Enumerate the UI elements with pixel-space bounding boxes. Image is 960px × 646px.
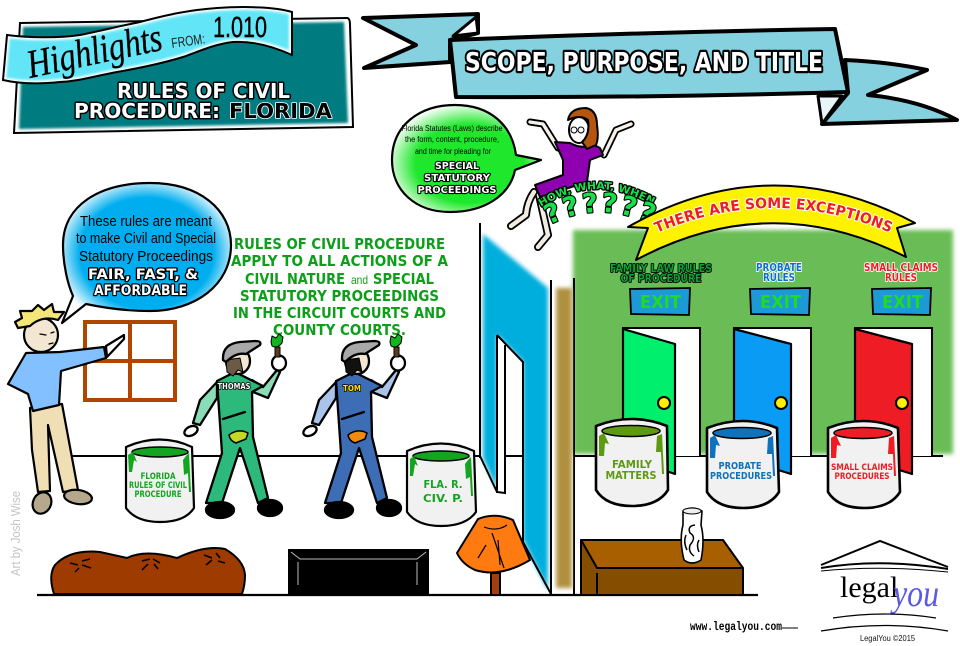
left ribbon fold <box>453 17 478 36</box>
thomas name: THOMAS <box>218 382 250 391</box>
text block: rules of civil procedure apply: RULES OF CIVIL PROCEDURE <box>234 235 445 253</box>
ribbon fold <box>818 96 842 124</box>
tom pocket <box>348 431 367 443</box>
door labels: FAMILY LAW RULES <box>610 263 712 275</box>
man sweater <box>8 347 106 411</box>
thomas feet <box>206 500 282 518</box>
paint can: florida rules <box>126 440 194 522</box>
credit: art by josh wise: Art by Josh Wise <box>9 491 23 576</box>
main ribbon <box>450 29 848 97</box>
man shoes <box>29 489 55 517</box>
yellow arch banner: there are some exceptions: THERE ARE SOME EXCEPTIONS <box>652 196 894 233</box>
text: how, what, when: HOW, WHAT, WHEN <box>538 180 657 208</box>
window <box>85 322 175 400</box>
logo: legalyou <box>821 541 948 643</box>
vase <box>681 508 703 563</box>
speech bubble: fair, fast and affordable: Statutory Proceedings <box>79 249 213 265</box>
paint can: florida rules: PROCEDURE <box>134 490 182 500</box>
man pants <box>30 404 78 492</box>
speech bubble: fair, fast and affordable: FAIR, FAST, & <box>88 267 198 283</box>
speech bubble: special statutory proceedings: PROCEEDINGS <box>418 185 496 196</box>
woman legs outline <box>511 192 548 247</box>
panel: highlights heading <box>3 7 353 133</box>
heading: scope, purpose, and title: SCOPE, PURPOSE, AND TITLE <box>465 48 823 78</box>
paint can: family matters <box>596 419 668 506</box>
text block: rules of civil procedure apply: SPECIAL <box>373 270 434 288</box>
panel: scope banner <box>363 14 957 124</box>
exit signs: EXIT <box>760 292 802 313</box>
woman head <box>569 117 589 143</box>
paint can: fla. r. civ. p.: FLA. R. <box>424 478 462 491</box>
door: red <box>855 329 912 474</box>
tom paint <box>390 334 402 347</box>
figure: painter thomas <box>183 334 286 518</box>
paint can: small claims procedures <box>828 421 900 508</box>
woman arms <box>530 122 631 155</box>
logo roof <box>821 541 948 569</box>
text block: rules of civil procedure apply: and <box>351 273 368 287</box>
text: question marks: ?????? <box>542 191 657 224</box>
door labels: RULES <box>763 272 795 284</box>
text block: rules of civil procedure apply <box>231 235 448 339</box>
text block: rules of civil procedure apply: COUNTY COURTS. <box>273 321 406 339</box>
rule number: 1.010 <box>213 12 267 44</box>
tom hand <box>302 356 405 438</box>
thomas arms <box>193 370 280 425</box>
speech bubble: fair, fast and affordable: These rules are meant <box>80 214 212 230</box>
door labels: OF PROCEDURE <box>620 273 702 285</box>
paint can: florida rules: RULES OF CIVIL <box>129 481 187 491</box>
woman hair <box>568 108 598 149</box>
title: procedure: PROCEDURE: <box>74 99 220 123</box>
logo base lines <box>821 614 948 631</box>
thomas head <box>226 348 250 374</box>
door labels: RULES <box>885 272 917 284</box>
tom suit <box>325 372 387 503</box>
thomas brush <box>275 347 280 357</box>
paint can: probate procedures: PROCEDURES <box>710 471 772 482</box>
text block: rules of civil procedure apply: IN THE CIRCUIT COURTS AND <box>233 304 446 322</box>
wall post <box>556 288 572 588</box>
thomas cap <box>223 341 260 362</box>
woman arms outline <box>530 122 631 155</box>
paint can: probate procedures <box>707 421 779 508</box>
cyan highlights banner <box>3 7 292 83</box>
thomas hair <box>226 358 243 376</box>
logo word: you: you <box>890 573 939 615</box>
exit signs: EXIT <box>640 292 682 313</box>
paint can: florida rules: FLORIDA <box>140 472 176 482</box>
man head <box>24 318 58 352</box>
website url: www.legalyou.com <box>690 621 782 634</box>
figure: woman shrugging <box>511 108 631 247</box>
thomas hand <box>183 356 286 438</box>
tom name: TOM <box>343 384 361 393</box>
speech bubble: special statutory proceedings: STATUTORY <box>424 173 491 184</box>
paint can: small claims procedures: SMALL CLAIMS <box>831 463 893 473</box>
speech bubble: special statutory proceedings <box>392 105 541 212</box>
exit doors <box>623 328 932 474</box>
speech bubble: fair, fast and affordable: to make Civil and Special <box>76 231 216 247</box>
tom head <box>345 348 369 374</box>
panel: green exceptions wall <box>573 230 953 454</box>
paint can: fla. r. civ. p. <box>407 444 476 526</box>
script: Highlights: Highlights <box>22 14 166 87</box>
figure: painter tom <box>302 334 405 518</box>
woman glasses <box>571 127 584 133</box>
floor line: exceptions room <box>574 455 943 457</box>
right ribbon tail <box>822 60 957 124</box>
title: rules of civil: RULES OF CIVIL <box>117 79 290 103</box>
text block: rules of civil procedure apply: APPLY TO ALL ACTIONS OF A <box>231 252 448 270</box>
speech bubble: special statutory proceedings: the form, content, procedure, <box>405 135 499 144</box>
woman dress <box>535 142 603 197</box>
teal title plate <box>14 18 353 133</box>
paint can: family matters: MATTERS <box>606 469 657 482</box>
left ribbon tail <box>363 14 478 68</box>
logo word: legal: legal <box>840 571 898 604</box>
thomas paint <box>271 334 283 347</box>
door labels: PROBATE <box>756 262 802 274</box>
speech bubble: special statutory proceedings: and time for pleading for <box>415 147 491 156</box>
door labels <box>610 262 938 285</box>
sofa <box>51 548 245 594</box>
paint can: probate procedures: PROBATE <box>718 461 762 472</box>
tom feet <box>325 500 401 518</box>
speech bubble: fair, fast and affordable: AFFORDABLE <box>94 283 187 299</box>
logo copyright: LegalYou ©2015 <box>860 634 916 643</box>
thomas pocket <box>229 431 248 443</box>
paint can: fla. r. civ. p.: CIV. P. <box>423 492 463 505</box>
speech bubble: special statutory proceedings: SPECIAL <box>435 161 480 172</box>
cabinet <box>581 540 743 595</box>
yellow arch banner: there are some exceptions <box>627 184 916 261</box>
open blue door and wall <box>480 223 574 596</box>
exit signs <box>630 288 931 315</box>
paint can: family matters: FAMILY <box>612 458 653 471</box>
man hair <box>15 304 64 328</box>
television <box>288 549 429 596</box>
text block: rules of civil procedure apply: CIVIL NATURE <box>245 270 345 288</box>
tom belt <box>342 412 364 419</box>
figure: man pointing <box>8 304 124 517</box>
thomas suit <box>206 372 268 503</box>
tom brush <box>394 347 399 357</box>
tom hair <box>345 358 362 376</box>
label: from: FROM: <box>170 30 206 51</box>
man hand <box>106 335 124 357</box>
door frames <box>623 328 932 456</box>
door: blue <box>734 329 791 474</box>
woman legs <box>511 192 548 247</box>
door labels: SMALL CLAIMS <box>864 262 938 274</box>
text block: rules of civil procedure apply: STATUTORY PROCEEDINGS <box>240 287 439 305</box>
title: florida: FLORIDA <box>229 99 333 123</box>
paint can: small claims procedures: PROCEDURES <box>834 472 890 482</box>
tom arms <box>312 370 399 425</box>
tom cap <box>342 341 379 362</box>
speech bubble: special statutory proceedings: Florida Statutes (Laws) describe <box>402 124 503 133</box>
doorway white panel <box>497 335 523 540</box>
speech bubble: fair, fast and affordable <box>62 183 231 323</box>
door: green <box>623 329 675 474</box>
man face <box>40 332 54 344</box>
wall and floor lines <box>37 456 758 595</box>
thomas belt <box>223 412 245 419</box>
exit signs: EXIT <box>882 292 924 313</box>
door knobs <box>658 397 908 409</box>
lamp <box>457 516 530 595</box>
